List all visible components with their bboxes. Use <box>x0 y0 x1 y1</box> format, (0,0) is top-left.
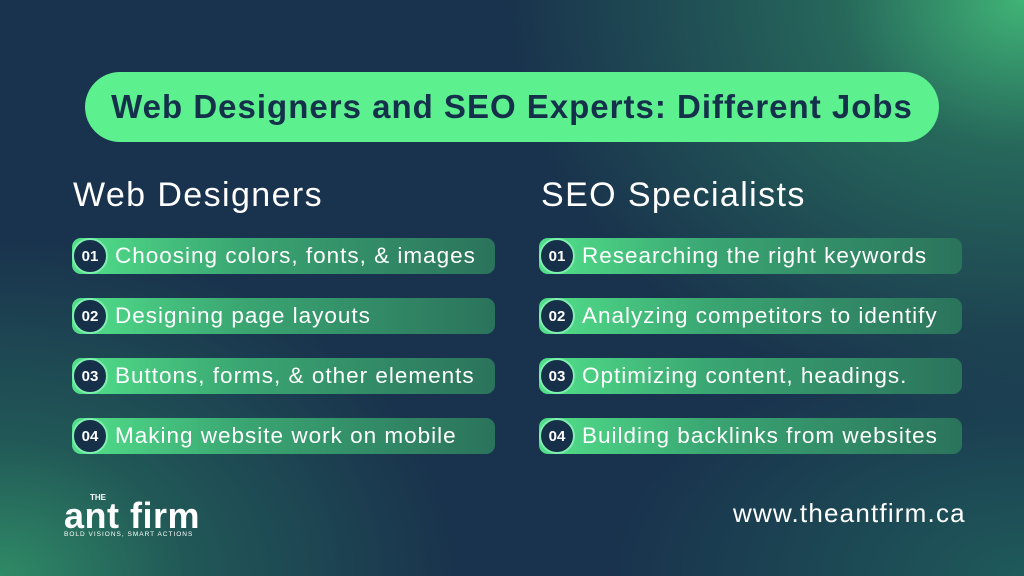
logo: BOLD VISIONS, SMART ACTIONS <box>64 531 193 538</box>
website url: www.theantfirm.ca <box>733 498 966 528</box>
item: wd 04: Making website work on mobile <box>115 423 457 448</box>
item: seo 02 <box>539 298 962 334</box>
title <box>85 72 939 142</box>
item: seo 04 <box>539 418 962 454</box>
item: wd 01: 01 <box>82 248 98 264</box>
item: wd 03: 03 <box>82 368 98 384</box>
logo: ant firm <box>64 495 200 536</box>
item: seo 02: Analyzing competitors to identify <box>582 303 938 328</box>
item: wd 03: Buttons, forms, & other elements <box>115 363 475 388</box>
title: Web Designers and SEO Experts: Different Jobs <box>111 88 913 125</box>
heading: seo specialists: SEO Specialists <box>541 176 806 214</box>
item: seo 03: 03 <box>549 368 565 384</box>
item: seo 03 <box>539 358 962 394</box>
item: wd 03 <box>72 358 495 394</box>
item: seo 01: 01 <box>549 248 565 264</box>
item: wd 01 <box>72 238 495 274</box>
item: wd 04: 04 <box>82 428 98 444</box>
logo: THE <box>90 493 106 502</box>
heading: web designers: Web Designers <box>73 176 323 214</box>
item: wd 02: Designing page layouts <box>115 303 371 328</box>
item: wd 02: 02 <box>82 308 98 324</box>
item: seo 02: 02 <box>549 308 565 324</box>
item: seo 01 <box>539 238 962 274</box>
item: seo 03: Optimizing content, headings. <box>582 363 907 388</box>
item: wd 02 <box>72 298 495 334</box>
item: wd 01: Choosing colors, fonts, & images <box>115 243 476 268</box>
item: seo 04: Building backlinks from websites <box>582 423 938 448</box>
item: seo 01: Researching the right keywords <box>582 243 927 268</box>
item: wd 04 <box>72 418 495 454</box>
item: seo 04: 04 <box>549 428 565 444</box>
